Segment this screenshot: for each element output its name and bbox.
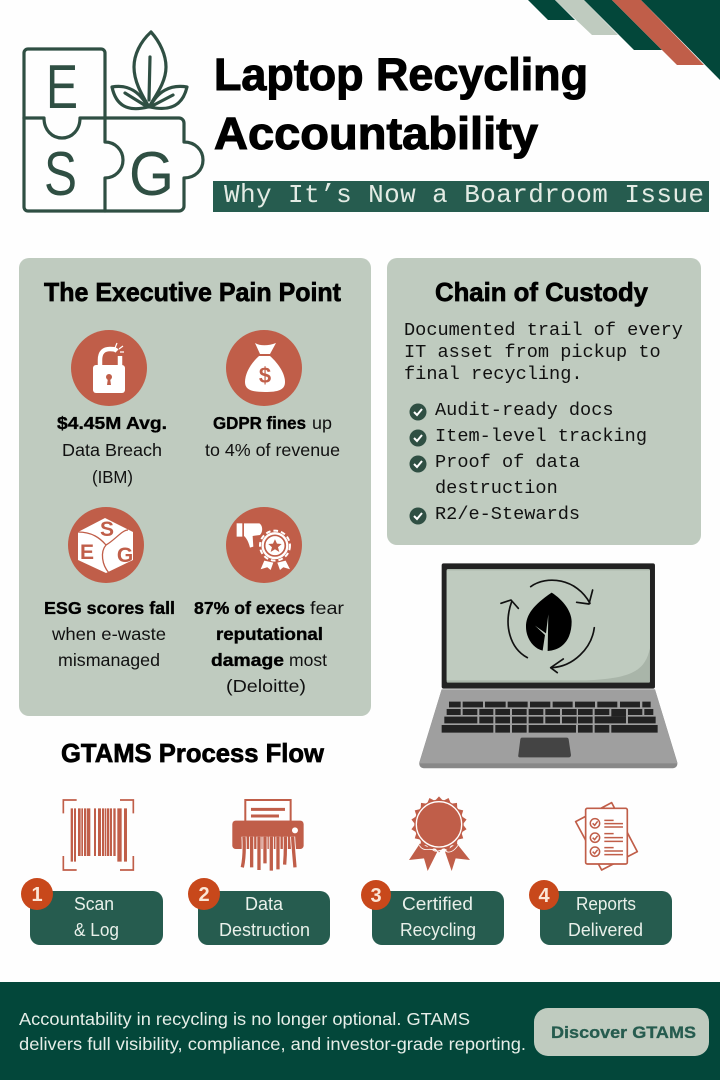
badge: 1 <box>21 878 53 910</box>
icon: checklist report <box>576 803 637 870</box>
title <box>214 49 588 159</box>
badge: 2: 2 <box>198 884 210 906</box>
text: data breach: Data Breach <box>62 440 162 460</box>
text: esg scores: when e-waste <box>51 624 166 644</box>
footer band <box>0 982 720 1080</box>
button: discover gtams <box>534 1008 709 1056</box>
badge: 3 <box>361 880 391 910</box>
step 1: scan and log: & Log <box>74 920 119 940</box>
checklist <box>410 400 647 525</box>
badge: 4: 4 <box>538 885 550 907</box>
step 3: certified recycling <box>361 880 504 945</box>
icon: broken lock <box>71 330 147 406</box>
icon: esg hexagon: E <box>80 541 94 564</box>
text: esg scores: ESG scores fall <box>44 598 175 618</box>
text: reputational damage <box>194 598 344 696</box>
text: reputational damage: (Deloitte) <box>226 676 306 696</box>
icon: money bag <box>226 330 302 406</box>
checklist: Proof of data <box>435 452 580 473</box>
step 3: certified recycling: Recycling <box>400 920 476 940</box>
badge: 4 <box>529 880 559 910</box>
text: gdpr fines: GDPR fines <box>213 413 306 433</box>
badge: 2 <box>188 878 220 910</box>
step 2: data destruction: Destruction <box>219 920 310 940</box>
text: reputational damage: 87% of execs <box>194 598 305 618</box>
step 4: reports delivered: Delivered <box>568 920 643 940</box>
text: esg scores: mismanaged <box>58 650 160 670</box>
title: Laptop Recycling <box>214 49 588 100</box>
step 2: data destruction <box>188 878 330 945</box>
heading: gtams process flow: GTAMS Process Flow <box>61 738 325 768</box>
heading: chain of custody: Chain of Custody <box>435 277 649 307</box>
illustration: laptop with recycling leaf <box>419 563 677 768</box>
icon: esg hexagon: S <box>100 518 114 541</box>
panel: the executive pain point <box>19 258 371 716</box>
icon: certified medal <box>409 796 470 871</box>
title: Accountability <box>214 108 538 159</box>
button: discover gtams: Discover GTAMS <box>551 1023 696 1042</box>
badge: 3: 3 <box>370 885 382 907</box>
text: reputational damage: fear <box>310 598 344 618</box>
icon: money bag: $ <box>259 363 271 388</box>
icon: barcode <box>63 800 133 870</box>
footer text <box>19 1009 526 1054</box>
icon: paper shredder <box>232 800 304 871</box>
icon: esg hexagon <box>68 507 144 583</box>
text: chain of custody description: final recycling. <box>404 364 583 385</box>
logo: ESG puzzle with leaves: S <box>44 140 77 209</box>
text: reputational damage: reputational <box>216 624 323 644</box>
footer text: delivers full visibility, compliance, and investor-grade reporting. <box>19 1034 526 1054</box>
text: data breach <box>57 413 167 487</box>
step 4: reports delivered: Reports <box>576 894 636 914</box>
subtitle banner: Why It’s Now a Boardroom Issue <box>224 180 704 210</box>
panel: chain of custody <box>387 258 701 545</box>
footer text: Accountability in recycling is no longer optional. GTAMS <box>19 1009 470 1029</box>
step 1: scan and log <box>21 878 163 945</box>
step 3: certified recycling: Certified <box>402 894 473 914</box>
text: chain of custody description <box>404 320 683 385</box>
logo: ESG puzzle with leaves <box>24 32 203 211</box>
logo: ESG puzzle with leaves: E <box>46 53 78 122</box>
text: gdpr fines <box>205 413 340 460</box>
text: chain of custody description: Documented trail of every <box>404 320 683 341</box>
step 1: scan and log: Scan <box>74 894 114 914</box>
text: esg scores <box>44 598 175 670</box>
text: data breach: $4.45M Avg. <box>57 413 167 433</box>
text: data breach: (IBM) <box>92 467 133 487</box>
heading: pain point: The Executive Pain Point <box>44 277 341 307</box>
step 4: reports delivered <box>529 880 672 945</box>
checklist: Audit-ready docs <box>435 400 614 421</box>
icon: esg hexagon: G <box>117 544 133 567</box>
badge: 1: 1 <box>31 884 43 906</box>
step 2: data destruction: Data <box>245 894 284 914</box>
checklist: R2/e-Stewards <box>435 504 580 525</box>
text: gdpr fines: to 4% of revenue <box>205 440 340 460</box>
text: reputational damage: most <box>289 650 327 670</box>
checklist: destruction <box>435 478 558 499</box>
text: gdpr fines: up <box>312 413 332 433</box>
text: chain of custody description: IT asset from pickup to <box>404 342 661 363</box>
checklist: Item-level tracking <box>435 426 647 447</box>
icon: thumbs down with badge <box>226 507 302 583</box>
text: reputational damage: damage <box>211 650 284 670</box>
corner decoration: diagonal stripes <box>528 0 720 80</box>
logo: ESG puzzle with leaves: G <box>129 140 174 209</box>
